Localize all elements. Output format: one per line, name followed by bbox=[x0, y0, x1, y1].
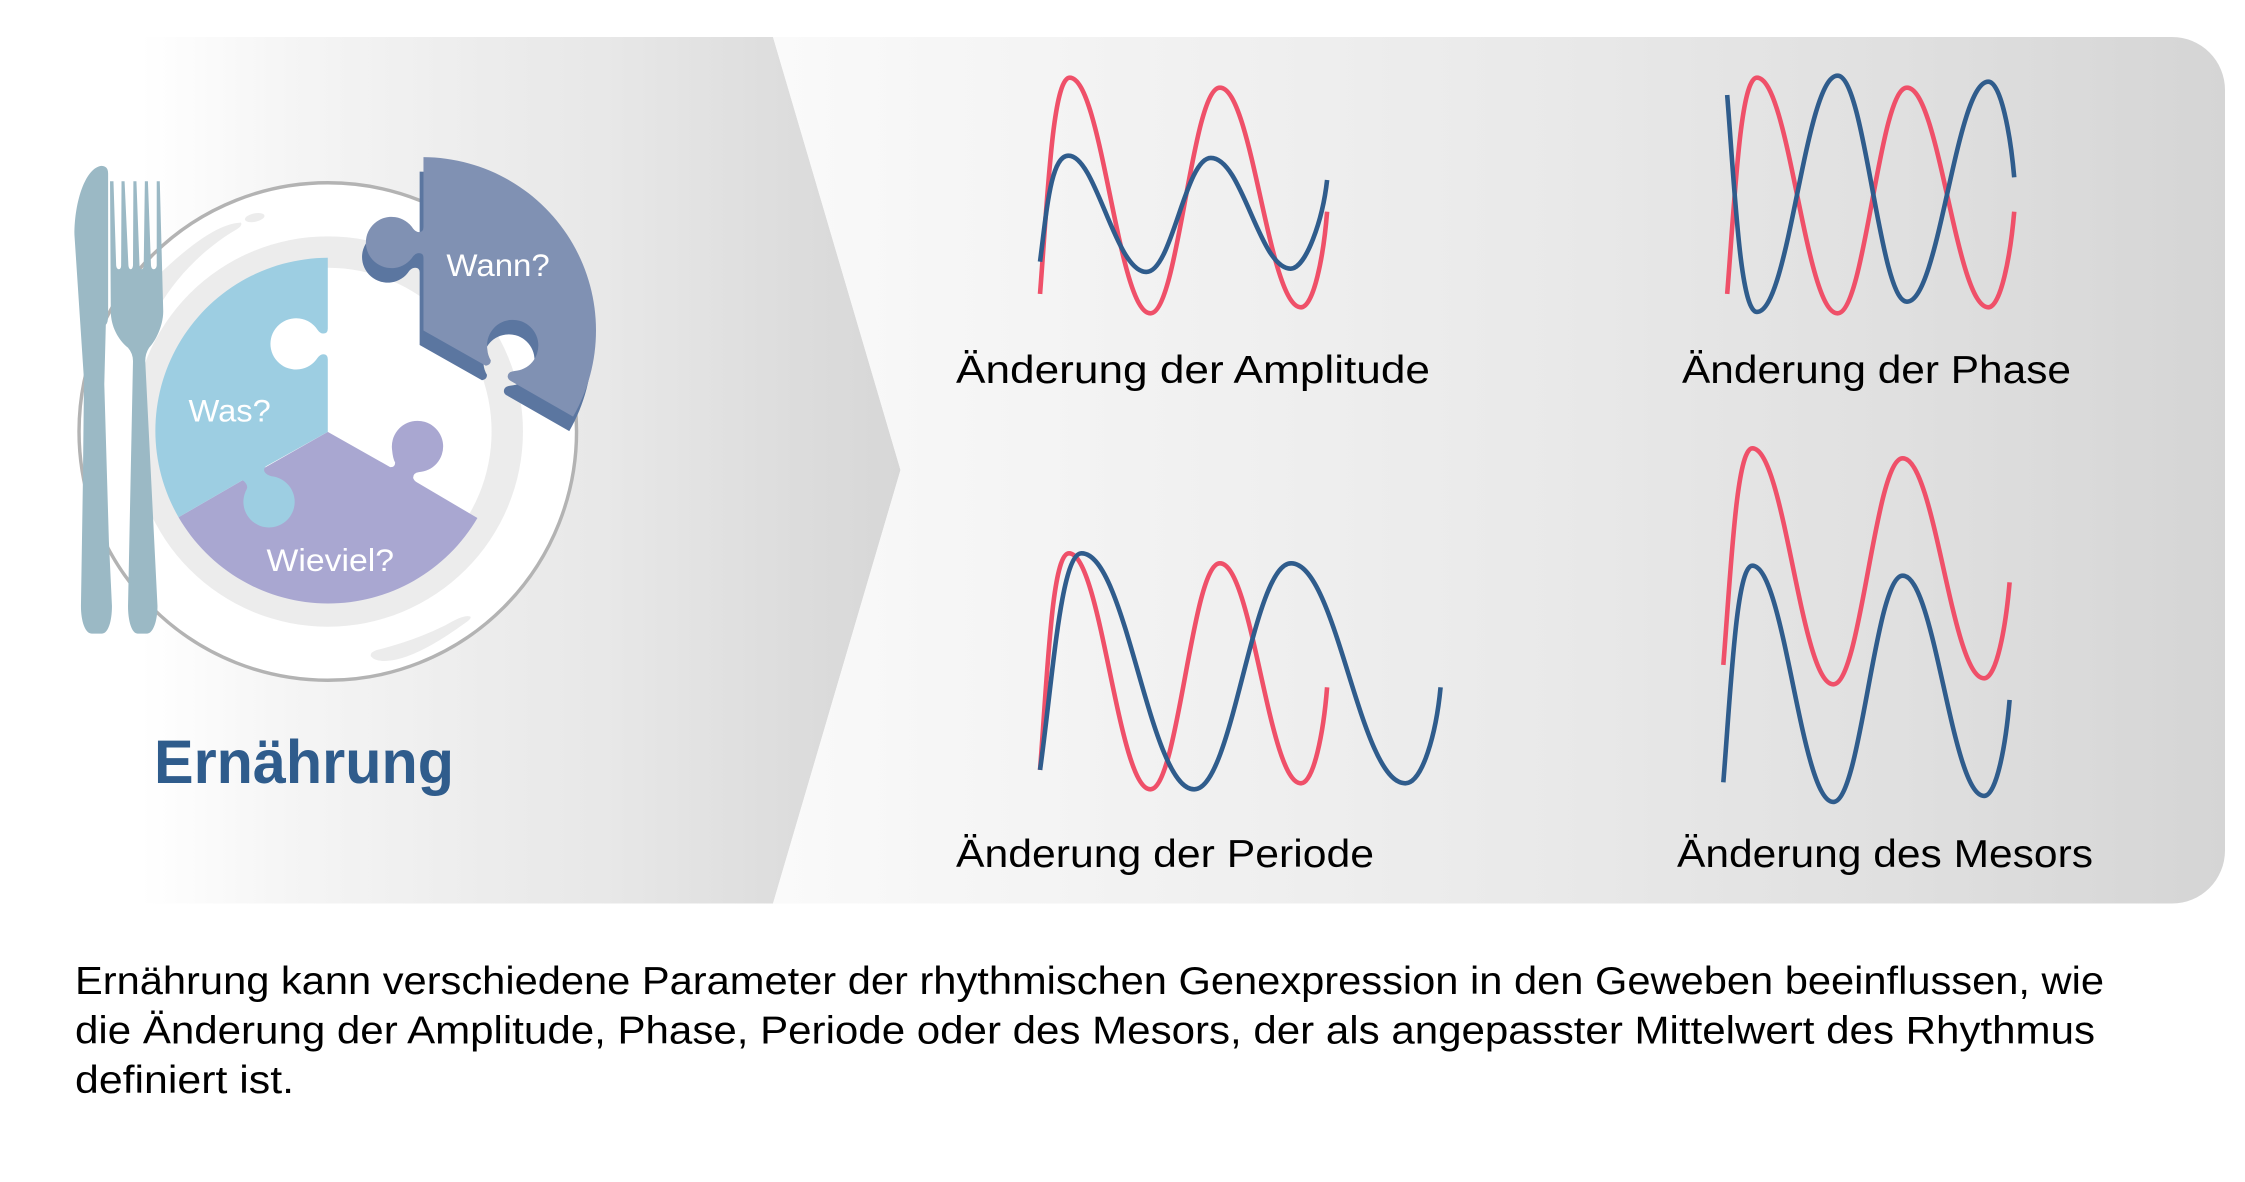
panel: nutrition arrow bbox=[0, 37, 900, 904]
text block: description: Ernährung kann verschiedene Parameter der rhythmischen Genexpression in den Geweben beeinflussen, wie bbox=[75, 960, 2104, 1003]
chart: Änderung der Periode bbox=[1040, 553, 1441, 789]
label: Änderung der Periode: Änderung der Periode bbox=[956, 833, 1374, 876]
chart: Änderung der Phase bbox=[1727, 76, 2014, 313]
puzzle piece: Wieviel bbox=[179, 421, 477, 603]
label: Änderung der Phase: Änderung der Phase bbox=[1682, 349, 2071, 392]
puzzle piece: Was bbox=[155, 258, 328, 527]
chart: Änderung der Amplitude bbox=[1040, 78, 1327, 313]
chart: Änderung des Mesors bbox=[1723, 448, 2010, 802]
illustration: plate with puzzle and cutlery bbox=[74, 157, 596, 680]
text block: description: die Änderung der Amplitude, Phase, Periode oder des Mesors, der als angepasster Mittelwert des Rhythmus bbox=[75, 1010, 2095, 1052]
text block: description: definiert ist. bbox=[75, 1059, 294, 1102]
puzzle piece: Was: Was? bbox=[188, 394, 271, 429]
panel: rhythm changes bbox=[773, 37, 2225, 904]
puzzle piece: Wieviel: Wieviel? bbox=[267, 543, 394, 578]
icon: fork bbox=[110, 181, 163, 634]
heading: Ernährung: Ernährung bbox=[154, 728, 454, 796]
label: Änderung der Amplitude: Änderung der Amplitude bbox=[956, 349, 1430, 392]
label: Änderung des Mesors: Änderung des Mesors bbox=[1677, 833, 2093, 876]
puzzle piece: Wann: Wann? bbox=[446, 248, 550, 283]
text block: description bbox=[75, 960, 2104, 1102]
plate bbox=[79, 183, 577, 680]
puzzle piece: Wann bbox=[362, 157, 596, 431]
icon: knife bbox=[74, 166, 112, 634]
